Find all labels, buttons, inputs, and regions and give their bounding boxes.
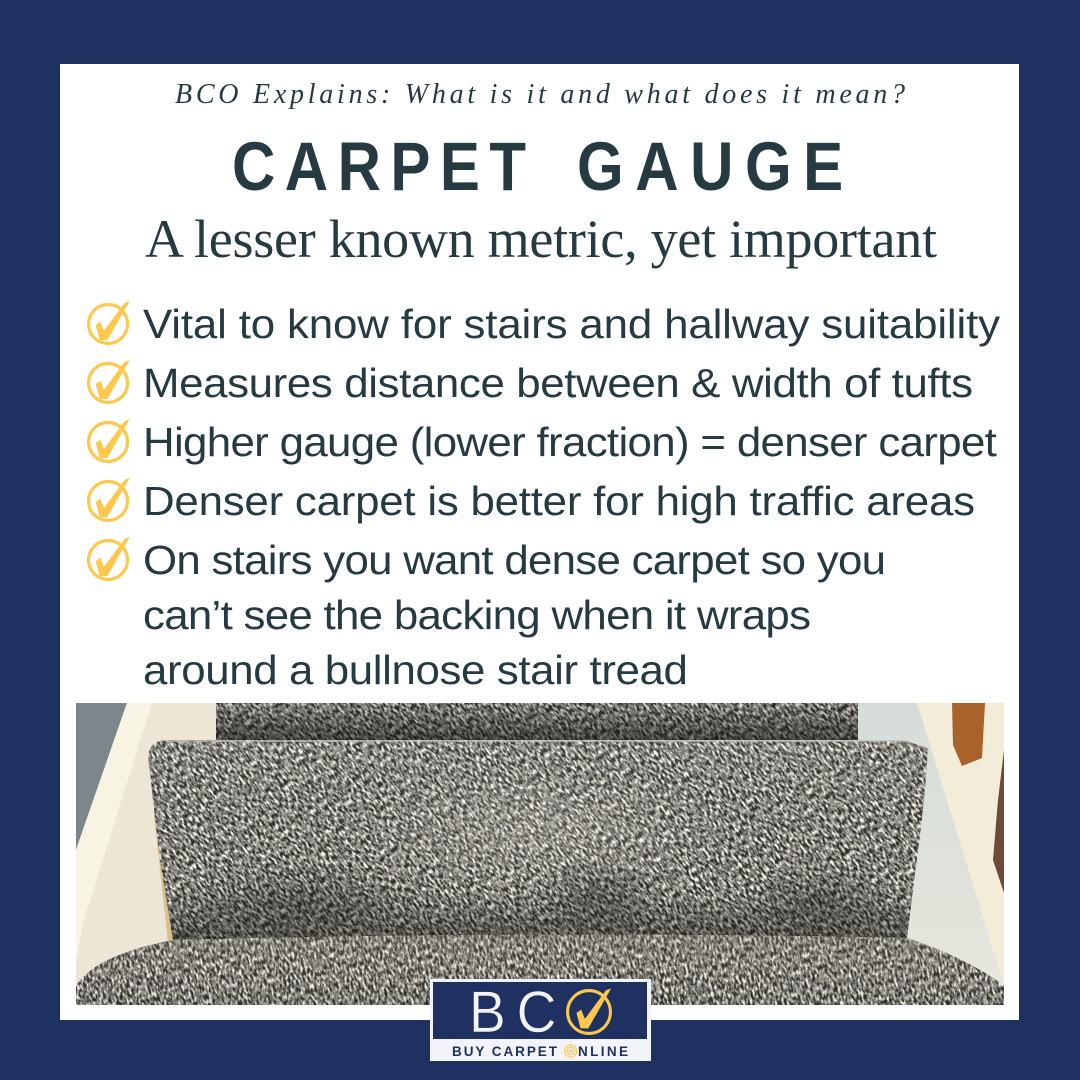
grey wall at upper left [76, 703, 127, 850]
top highlight on riser [166, 740, 906, 742]
logo: BCO Buy Carpet Online [430, 979, 651, 1061]
title: GAUGE [577, 127, 843, 205]
brown spindle at right edge [993, 750, 1004, 893]
item 5 text [143, 537, 886, 693]
logo plate [430, 979, 651, 1061]
item 5 text: On stairs you want dense carpet so you [143, 537, 886, 583]
right trim [917, 703, 1004, 985]
icon: check mark 5 [88, 537, 130, 580]
item 5 [88, 537, 886, 693]
eyebrow heading: BCO Explains: What is it and what does it mean? [175, 79, 905, 110]
icon: check mark 1 [88, 301, 130, 344]
lower tread carpet [76, 934, 1004, 1005]
logo letters: BC [469, 980, 556, 1044]
logo check icon [568, 989, 611, 1033]
item 4 [88, 478, 975, 524]
logo wordmark end: NLINE [578, 1044, 628, 1059]
bright edge on left wall [76, 703, 152, 960]
item 1 text: Vital to know for stairs and hallway suitability [143, 301, 1001, 347]
riser carpet [148, 740, 928, 940]
item 5 text: around a bullnose stair tread [143, 647, 688, 693]
subtitle: A lesser known metric, yet important [145, 209, 937, 269]
title [232, 127, 843, 205]
cream wall left [76, 703, 216, 990]
item 1 [88, 301, 1001, 347]
item 4 text: Denser carpet is better for high traffic areas [143, 478, 975, 524]
logo navy block [433, 982, 647, 1039]
icon: check mark 3 [88, 419, 130, 462]
item 3 [88, 419, 997, 465]
checklist [88, 301, 1001, 693]
right wall [858, 703, 1004, 985]
upper stair carpet [216, 703, 858, 740]
item 2 [88, 360, 973, 406]
photo: carpeted stairs [76, 703, 1004, 1005]
logo wordmark: BUY CARPET [452, 1044, 558, 1059]
title: CARPET [232, 127, 526, 205]
yellow edge along riser [154, 815, 174, 942]
wooden banister [952, 703, 985, 766]
item 2 text: Measures distance between & width of tufts [143, 360, 973, 406]
item 3 text: Higher gauge (lower fraction) = denser carpet [143, 419, 997, 465]
icon: check mark 4 [88, 478, 130, 520]
item 5 text: can’t see the backing when it wraps [143, 592, 811, 638]
white panel [60, 64, 1019, 1020]
logo spiral O [564, 1045, 576, 1057]
icon: check mark 2 [88, 360, 130, 402]
